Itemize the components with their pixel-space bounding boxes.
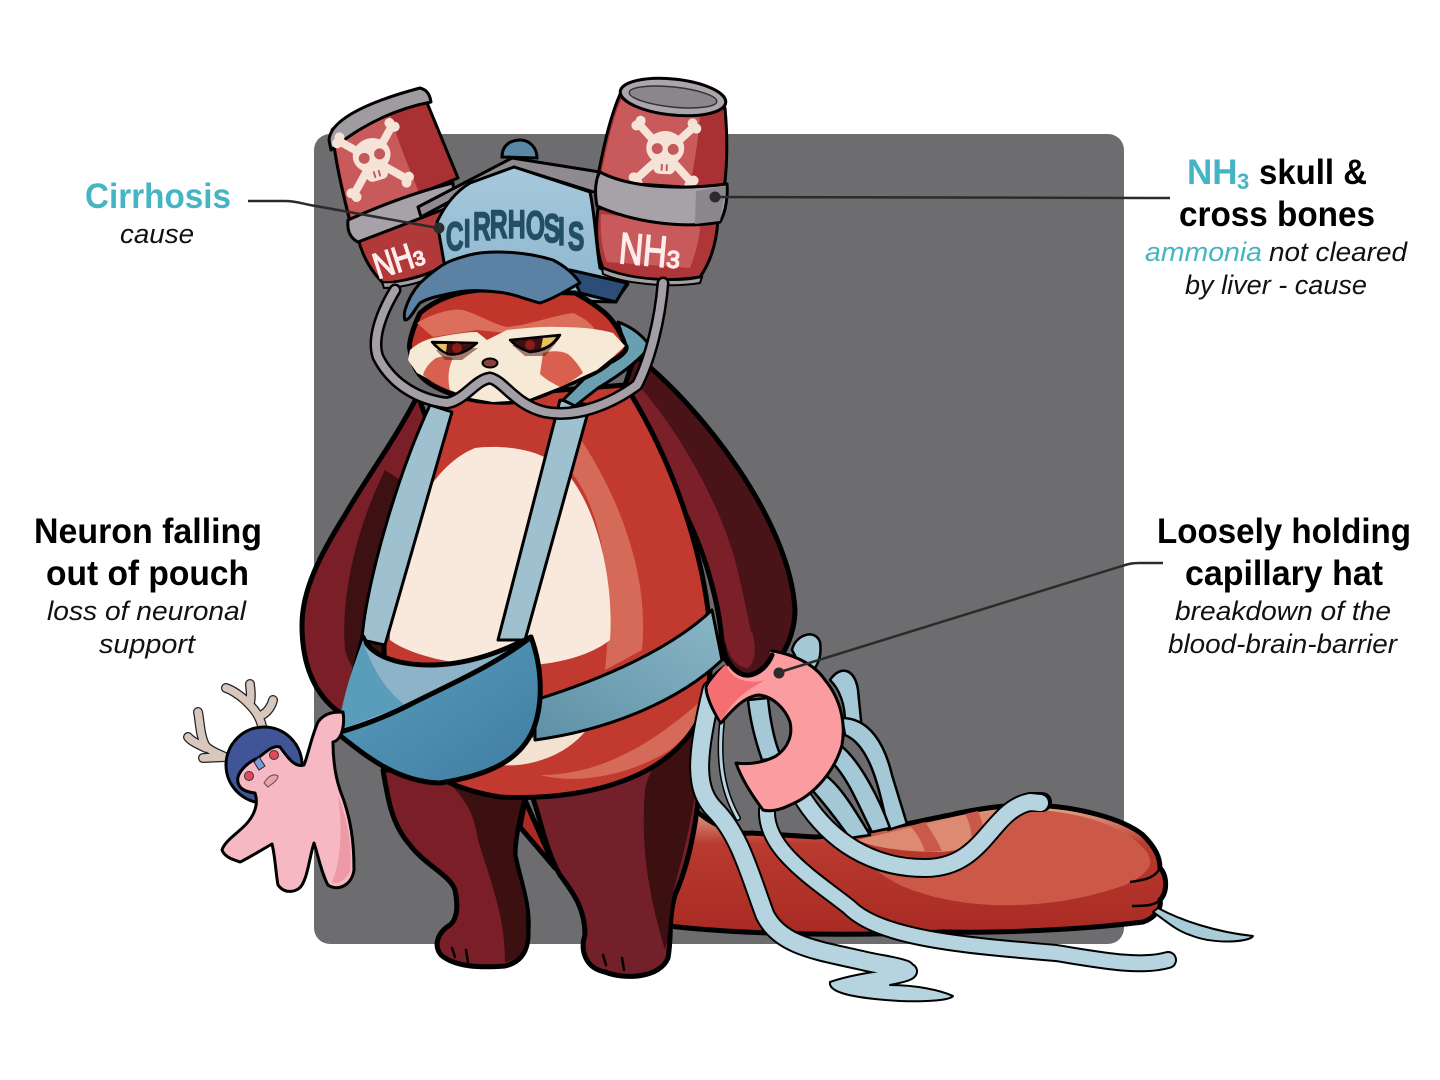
right NH3 can (596, 74, 728, 285)
can rim (618, 74, 728, 120)
front capillaries (700, 690, 1253, 1001)
leader line: capillary hat (774, 563, 1163, 678)
label: loosely holding capillary hat (1157, 512, 1411, 659)
capillaries behind the hat (748, 634, 907, 838)
left arm (302, 395, 430, 716)
label: NH3 skull and cross bones: cross bones (1179, 195, 1375, 234)
label: loosely holding capillary hat: blood-brain-barrier (1168, 629, 1398, 659)
label: cirrhosis: Cirrhosis (85, 177, 231, 216)
pouch (337, 637, 540, 783)
belly fur (390, 447, 611, 666)
neuron body (222, 712, 354, 891)
label: neuron falling out of pouch (34, 512, 262, 659)
label: loosely holding capillary hat: breakdown of the (1175, 596, 1391, 626)
panel: grey background square (314, 134, 1124, 944)
capillary hat held by paw (706, 650, 843, 811)
leader line: skull and cross bones (710, 192, 1170, 202)
neuron head cap (226, 727, 302, 803)
label: neuron falling out of pouch: loss of neuronal (47, 596, 247, 626)
blue cap (404, 252, 627, 320)
label: loosely holding capillary hat: Loosely holding (1157, 512, 1411, 551)
hat box with Cirrhosis text (418, 140, 628, 302)
left can NH3 label: NH3 (368, 232, 429, 287)
left eye (432, 342, 477, 354)
red panda tail (520, 800, 1166, 934)
lower belly (500, 725, 590, 765)
label: NH3 skull and cross bones: NH (1187, 153, 1238, 192)
label: neuron falling out of pouch: out of pouch (46, 554, 249, 593)
left strap (362, 405, 452, 645)
panda head (408, 290, 626, 402)
label: cirrhosis: cause (120, 219, 194, 249)
pouch belt (535, 610, 722, 740)
label: cirrhosis (85, 177, 231, 249)
leader line: cirrhosis (248, 201, 444, 234)
left NH3 can (329, 88, 458, 288)
gas mask tube (376, 283, 663, 413)
blue collar (563, 322, 650, 406)
right leg (530, 700, 702, 976)
antlers (188, 684, 273, 760)
label: NH3 skull and cross bones: by liver - cause (1185, 270, 1367, 300)
label: NH3 skull and cross bones: skull & (1259, 153, 1367, 192)
panda torso (384, 385, 711, 798)
right eye (510, 335, 560, 352)
label: neuron falling out of pouch: Neuron falling (34, 512, 262, 551)
right arm with paw (620, 355, 795, 671)
label: NH3 skull and cross bones (1145, 153, 1408, 300)
paw tip over hat (723, 632, 772, 675)
right strap (498, 400, 590, 640)
left leg (383, 770, 528, 967)
nose (482, 358, 498, 368)
right can NH3 label: NH3 (617, 224, 683, 278)
face cream fur (408, 327, 625, 402)
label: loosely holding capillary hat: capillary hat (1185, 554, 1383, 593)
label: NH3 skull and cross bones: 3 (1237, 169, 1249, 194)
label: NH3 skull and cross bones: not cleared (1269, 237, 1408, 267)
label: neuron falling out of pouch: support (99, 629, 197, 659)
neuron falling out of pouch (188, 684, 354, 891)
label: NH3 skull and cross bones: ammonia (1145, 237, 1262, 267)
CIRRHOSIS lettering: CIRRHOSIS (446, 203, 584, 260)
